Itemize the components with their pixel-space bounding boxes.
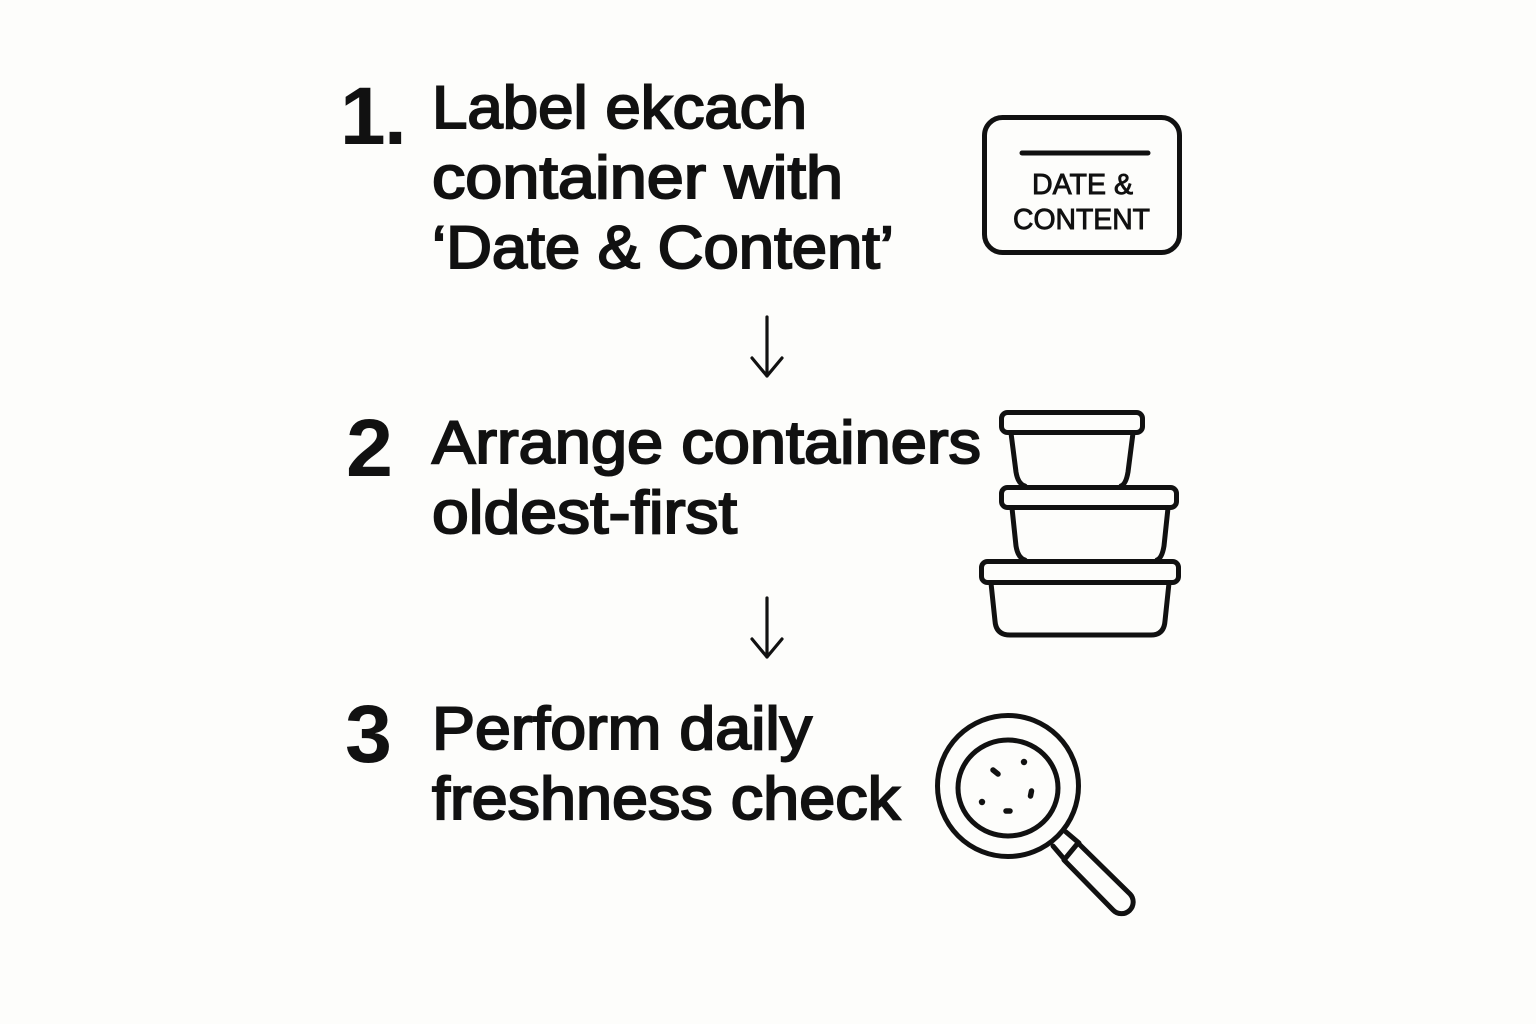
step 2 (346, 403, 981, 546)
step 2 number: 2 (346, 403, 393, 494)
step 2 text (432, 409, 981, 546)
arrow: step 1 to step 2 (752, 317, 782, 376)
step 1 text: Label ekcach (432, 74, 807, 141)
icon: date and content label: CONTENT (1013, 204, 1150, 236)
step 2 text: oldest-first (432, 479, 737, 546)
step 3 text: freshness check (432, 765, 901, 832)
step 1 (340, 71, 894, 281)
icon: date and content label (984, 118, 1180, 252)
icon: magnifying glass (938, 716, 1133, 914)
step 2 text: Arrange containers (432, 409, 981, 476)
icon: date and content label: DATE & (1032, 169, 1133, 201)
step 3 text: Perform daily (432, 695, 812, 762)
step 3 number: 3 (345, 689, 392, 780)
step 1 text (432, 74, 894, 281)
step 1 text: ‘Date & Content’ (432, 214, 894, 281)
step 3 text (432, 695, 901, 832)
step 3 (345, 689, 901, 832)
step 1 text: container with (432, 144, 843, 211)
step 1 number: 1. (340, 71, 407, 162)
icon: stacked containers (982, 412, 1178, 635)
arrow: step 2 to step 3 (752, 598, 782, 657)
